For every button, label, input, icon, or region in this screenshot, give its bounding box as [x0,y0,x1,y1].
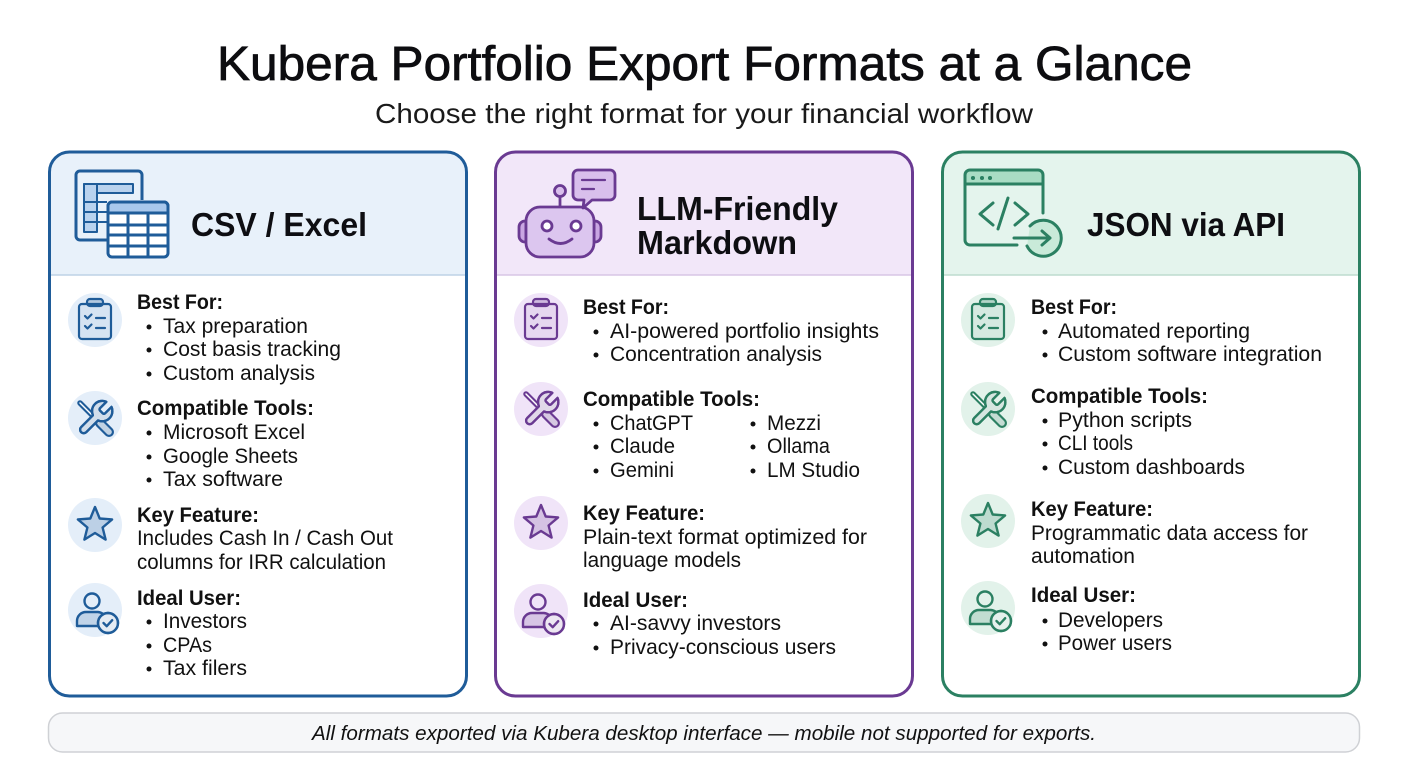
heading: CSV / Excel: CSV / Excel [191,207,367,244]
section: Best For: Custom analysis [163,362,315,385]
section: Compatible Tools: Microsoft Excel [163,421,305,444]
section: Key Feature: Key Feature: [1031,498,1153,521]
section: Ideal User [68,583,247,680]
section: Key Feature: columns for IRR calculation [137,551,386,574]
section: Ideal User: Ideal User: [1031,584,1136,607]
section: Compatible Tools: Custom dashboards [1058,456,1245,479]
panel: JSON via API [942,152,1360,696]
section: Key Feature: Programmatic data access for [1031,522,1308,545]
section: Key Feature: Plain-text format optimized for [583,526,867,549]
section: Best For: Concentration analysis [610,343,822,366]
panel: LLM-Friendly Markdown [496,152,912,696]
heading: JSON via API: JSON via API [1087,207,1285,244]
section: Best For [514,293,879,366]
section: Best For: Custom software integration [1058,343,1322,366]
section: Ideal User: Ideal User: [583,589,688,612]
section: Compatible Tools: Gemini [610,459,674,482]
section: Key Feature: Key Feature: [137,504,259,527]
section: Ideal User: Privacy-conscious users [610,636,836,659]
icon: spreadsheets [76,171,168,257]
section: Compatible Tools: Tax software [163,468,283,491]
section: Key Feature [961,494,1308,568]
section: Compatible Tools: Compatible Tools: [137,397,314,420]
title: Kubera Portfolio Export Formats at a Glance [217,38,1192,91]
heading: LLM-Friendly Markdown: Markdown [637,225,797,262]
section: Key Feature: Key Feature: [583,502,705,525]
section: Best For [961,293,1322,366]
footer note [48,713,1360,752]
section: Compatible Tools [68,391,314,491]
section: Compatible Tools: CLI tools [1058,432,1133,455]
icon: code window with arrow [965,170,1061,256]
icon: robot with speech bubble [519,170,615,257]
section: Ideal User: AI-savvy investors [610,612,781,635]
section: Ideal User: Developers [1058,609,1163,632]
section: Ideal User [514,584,836,659]
section: Compatible Tools: LM Studio [767,459,860,482]
section: Key Feature: Includes Cash In / Cash Out [137,527,393,550]
section: Compatible Tools: Python scripts [1058,409,1192,432]
section: Ideal User: Ideal User: [137,587,241,610]
section: Best For: AI-powered portfolio insights [610,320,879,343]
section: Compatible Tools [514,382,860,482]
section: Compatible Tools: Compatible Tools: [583,388,760,411]
section: Ideal User: Tax filers [163,657,247,680]
section: Best For: Automated reporting [1058,320,1250,343]
heading: LLM-Friendly Markdown: LLM-Friendly [637,191,838,228]
subtitle: Choose the right format for your financial workflow [375,98,1034,129]
section: Compatible Tools: Mezzi [767,412,821,435]
section: Key Feature [514,496,867,572]
section: Best For: Best For: [583,296,669,319]
heading: LLM-Friendly Markdown [637,191,838,262]
section: Ideal User: Investors [163,610,247,633]
section: Compatible Tools: Ollama [767,435,830,458]
section: Key Feature: automation [1031,545,1135,568]
section: Best For: Cost basis tracking [163,338,341,361]
section: Compatible Tools: Google Sheets [163,445,298,468]
section: Ideal User: Power users [1058,632,1172,655]
section: Key Feature [68,498,393,574]
footer note: All formats exported via Kubera desktop interface — mobile not supported for exports. [310,722,1096,745]
section: Compatible Tools: Claude [610,435,675,458]
section: Compatible Tools: ChatGPT [610,412,693,435]
section: Ideal User: CPAs [163,634,212,657]
section: Compatible Tools [961,382,1245,479]
section: Best For: Tax preparation [163,315,308,338]
section: Compatible Tools: Compatible Tools: [1031,385,1208,408]
section: Key Feature: language models [583,549,741,572]
section: Best For [68,291,341,385]
panel: CSV / Excel [50,152,466,696]
section: Ideal User [961,581,1172,655]
section: Best For: Best For: [137,291,223,314]
section: Best For: Best For: [1031,296,1117,319]
